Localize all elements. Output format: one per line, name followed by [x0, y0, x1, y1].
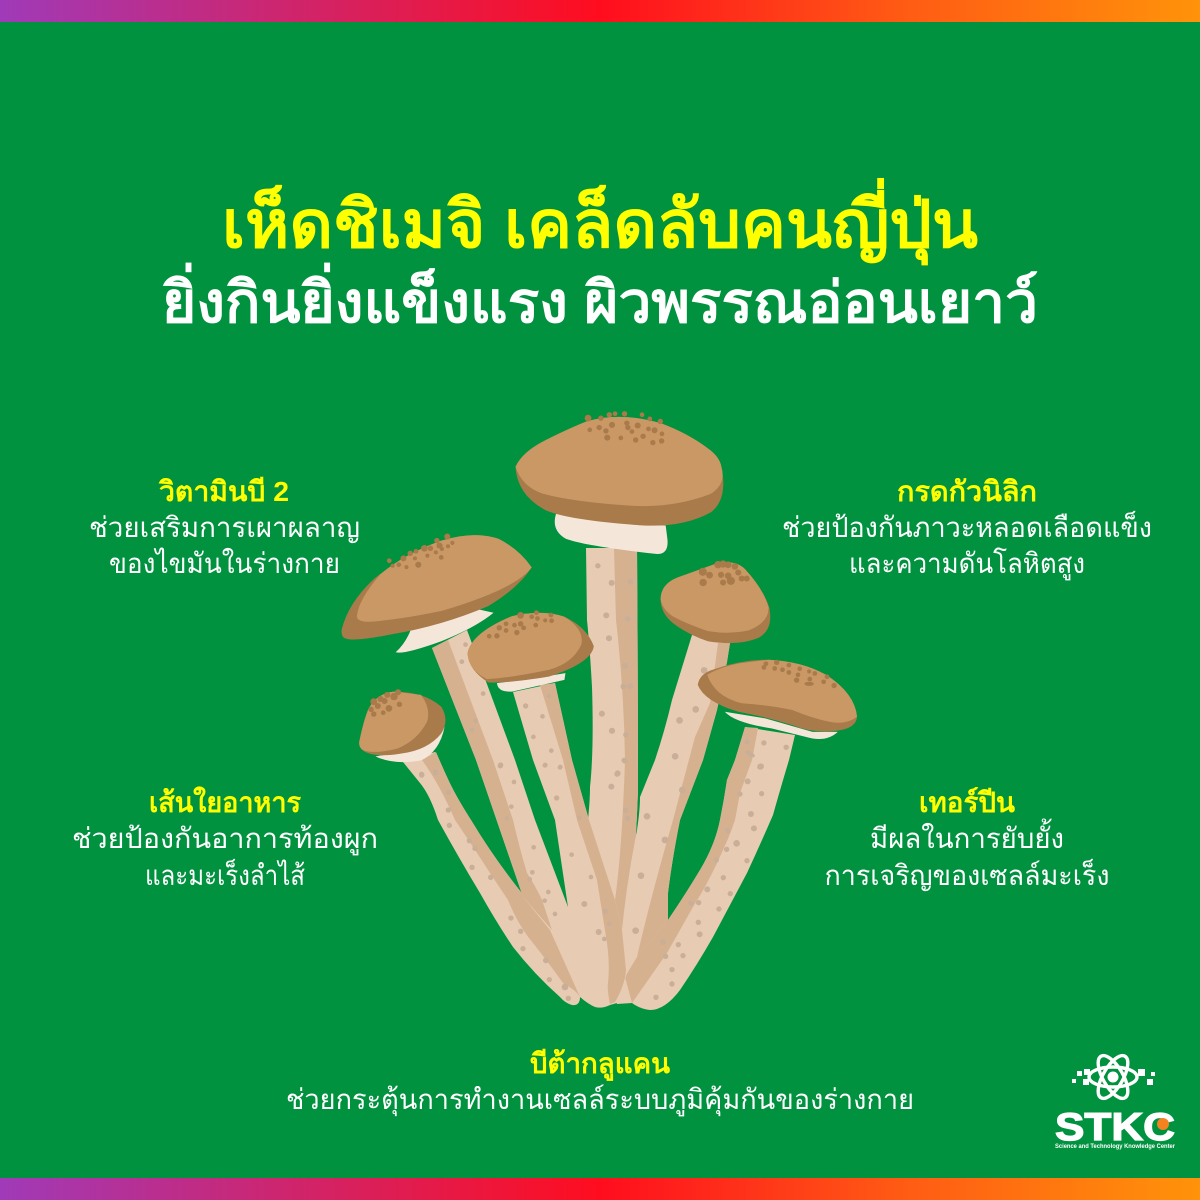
- text block: dietary fibre: ช่วยป้องกันอาการท้องผูก: [72, 823, 378, 856]
- text block: beta glucan: ช่วยกระตุ้นการทำงานเซลล์ระบบภูมิคุ้มกันของร่างกาย: [286, 1084, 914, 1117]
- text block: terpene: มีผลในการยับยั้ง: [870, 818, 1064, 854]
- text block: vitamin B2: วิตามินบี 2: [158, 476, 289, 507]
- title: [162, 177, 1038, 335]
- top gradient bar: [0, 0, 1200, 22]
- stem: tall centre: [586, 548, 638, 1004]
- cap: right big: [698, 660, 857, 739]
- cap: tall centre: [516, 411, 723, 554]
- caps and gills: [342, 411, 857, 762]
- logo orange dot: [1157, 1118, 1169, 1130]
- logo: STKC: [1055, 1051, 1176, 1150]
- title: เห็ดชิเมจิ เคล็ดลับคนญี่ปุ่น: [222, 177, 978, 266]
- illustration: shimeji mushrooms: [342, 411, 857, 1010]
- cap: right small: [661, 560, 770, 643]
- text block: vitamin B2: ของไขมันในร่างกาย: [109, 547, 340, 579]
- icon: atom: [1089, 1051, 1137, 1103]
- text block: guanylic acid: กรดกัวนิลิก: [897, 476, 1037, 507]
- text block: dietary fibre: และมะเร็งลำไส้: [145, 858, 305, 891]
- logo wordmark: STKC: [1055, 1106, 1175, 1149]
- cap: centre small: [468, 610, 594, 692]
- text block: guanylic acid: [782, 476, 1152, 581]
- logo tagline: Science and Technology Knowledge Center: [1055, 1144, 1176, 1150]
- text block: terpene: [824, 787, 1110, 891]
- stem: left big: [432, 630, 585, 997]
- text block: terpene: การเจริญของเซลล์มะเร็ง: [824, 858, 1110, 891]
- text block: dietary fibre: [72, 786, 378, 891]
- text block: beta glucan: บีต้ากลูแคน: [530, 1048, 670, 1081]
- cap: far left: [359, 689, 445, 762]
- icon: pixel squares: [1072, 1069, 1155, 1085]
- stem spots: lower: [419, 758, 764, 1001]
- text block: vitamin B2: [89, 476, 360, 579]
- stem: centre small: [513, 683, 627, 1008]
- stem: right big: [625, 727, 795, 1010]
- text block: beta glucan: [286, 1048, 914, 1117]
- text block: terpene: เทอร์ปีน: [919, 787, 1015, 818]
- bottom gradient bar: [0, 1178, 1200, 1200]
- text block: dietary fibre: เส้นใยอาหาร: [149, 786, 301, 818]
- text block: guanylic acid: และความดันโลหิตสูง: [849, 547, 1085, 581]
- text block: guanylic acid: ช่วยป้องกันภาวะหลอดเลือดแข็ง: [782, 510, 1152, 543]
- stem: right small: [622, 635, 730, 977]
- stem: far left: [403, 752, 580, 1005]
- text block: vitamin B2: ช่วยเสริมการเผาผลาญ: [89, 512, 360, 543]
- cap: left big: [342, 534, 532, 653]
- stem spots: upper: [419, 563, 789, 778]
- title: ยิ่งกินยิ่งแข็งแรง ผิวพรรณอ่อนเยาว์: [162, 262, 1038, 335]
